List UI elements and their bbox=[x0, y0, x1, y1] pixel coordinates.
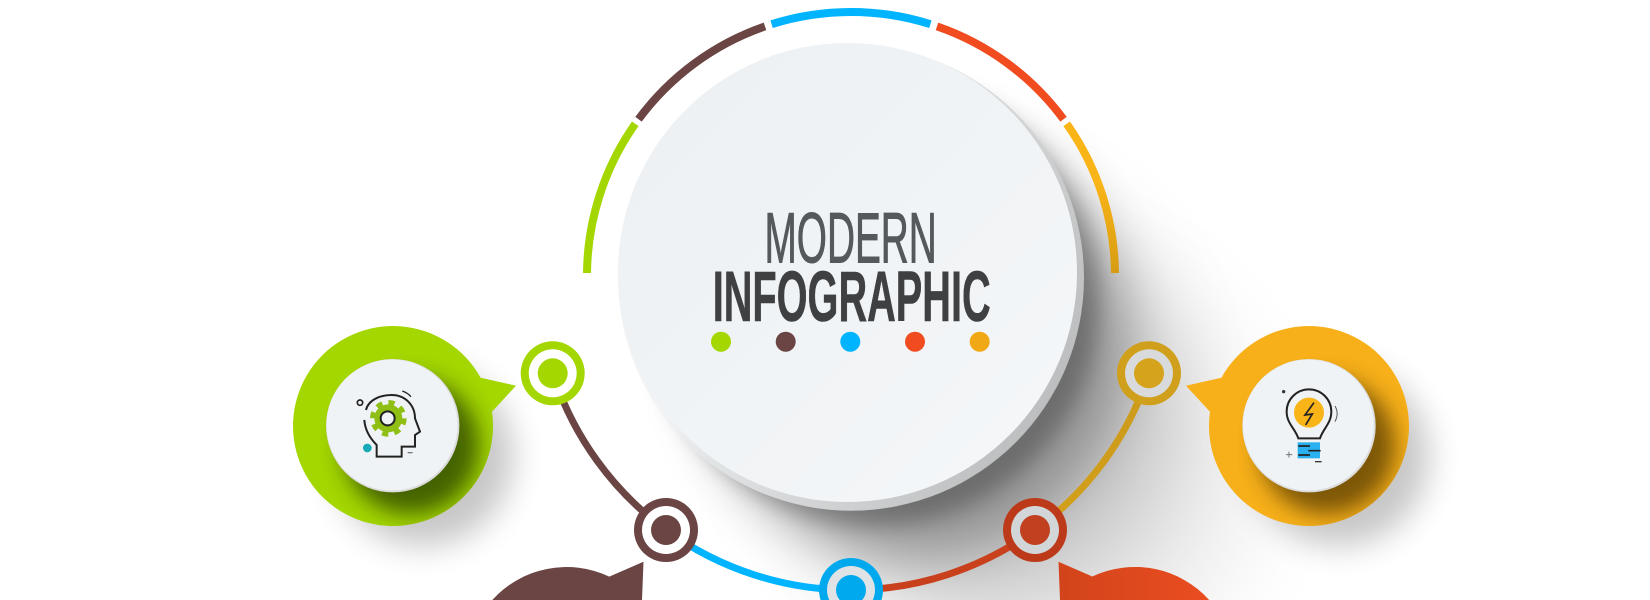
brown bubble bbox=[492, 562, 644, 600]
green bubble bbox=[293, 326, 516, 546]
node: yellow bbox=[1117, 341, 1181, 405]
colour dots bbox=[711, 332, 990, 352]
icon: light bulb bbox=[1282, 389, 1337, 462]
connector arc through the nodes bbox=[553, 373, 1149, 590]
icon: head with gear bbox=[357, 391, 420, 457]
white disc bbox=[1242, 359, 1376, 492]
title: INFOGRAPHIC: INFOGRAPHIC bbox=[713, 258, 991, 337]
outer arc: yellow segment bbox=[1067, 124, 1115, 273]
title: MODERN: MODERN bbox=[764, 200, 937, 279]
node: red bbox=[1003, 498, 1067, 562]
infographic canvas bbox=[293, 8, 1444, 600]
main disc bbox=[618, 43, 1084, 511]
node: green bbox=[521, 341, 585, 405]
node: blue bbox=[819, 558, 883, 600]
main disc long shadow bbox=[647, 74, 1241, 600]
node: brown bbox=[634, 498, 698, 562]
segmented outer arc ring: first four segments bbox=[587, 12, 1064, 273]
white disc bbox=[326, 359, 459, 492]
yellow bubble bbox=[1186, 326, 1429, 546]
red bubble bbox=[1058, 562, 1209, 600]
